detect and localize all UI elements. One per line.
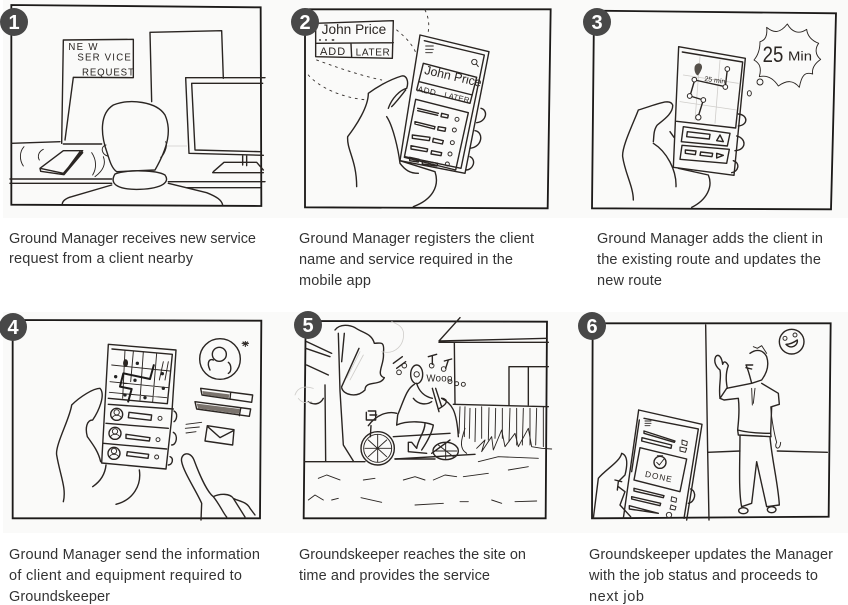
badge 2: 2	[299, 12, 311, 34]
house and fence	[439, 318, 552, 453]
panel 6: job status update	[588, 323, 833, 605]
panel 1: manager receives request	[9, 5, 265, 267]
badge 5	[294, 311, 322, 339]
caption 6: Groundskeeper updates the Manager	[589, 547, 833, 563]
client popup card: John Price	[322, 22, 386, 37]
client popup card: LATER	[356, 47, 390, 58]
waving groundskeeper	[715, 346, 781, 514]
smartphone showing done	[623, 410, 702, 520]
sketch frame 2	[305, 9, 551, 208]
badge 3: 3	[591, 12, 603, 34]
envelope with motion lines	[185, 422, 234, 445]
panel 5: groundskeeper on mower	[295, 318, 552, 584]
dashed zoom lines	[308, 10, 429, 100]
caption 6: with the job status and proceeds to	[588, 568, 818, 584]
caption 6: next job	[589, 589, 644, 605]
fingers behind phone	[688, 489, 695, 503]
caption 5	[299, 547, 526, 584]
smiley	[779, 329, 804, 354]
caption 4: Ground Manager send the information	[9, 547, 260, 563]
sketch frame 3	[592, 11, 836, 209]
caption 1	[9, 231, 256, 267]
person seen from behind	[62, 102, 223, 205]
caption 5: Groundskeeper reaches the site on	[299, 547, 526, 563]
wall partition	[150, 31, 223, 102]
tree	[295, 322, 404, 461]
caption 2	[299, 231, 534, 289]
sketch frame 1	[11, 5, 261, 206]
thought cloud: 25 min: Min	[788, 49, 812, 64]
caption 3	[597, 231, 823, 289]
badge 5: 5	[302, 315, 314, 337]
smartphone with map and staff list	[102, 344, 176, 469]
caption 4: of client and equipment required to	[9, 568, 242, 584]
smartphone: ADD	[417, 84, 437, 98]
speech bubble: new service request: SER VICE	[77, 53, 132, 64]
caption 3: Ground Manager adds the client in	[597, 231, 823, 247]
badge 4: 4	[7, 317, 19, 339]
badge 1	[0, 8, 28, 36]
thought cloud: 25 min: 25	[763, 42, 783, 67]
holding hand	[623, 102, 710, 207]
badge 6	[578, 312, 606, 340]
vibrating phone	[20, 147, 104, 177]
fingers behind phone	[466, 108, 486, 170]
ground lines	[304, 454, 538, 505]
equipment progress bars	[195, 388, 253, 416]
panel 2: manager registers client	[299, 9, 551, 289]
client popup card	[316, 21, 393, 58]
badge 2	[291, 8, 319, 36]
badge 6: 6	[586, 316, 598, 338]
badge 1: 1	[8, 12, 20, 34]
singing text: Wooo	[426, 374, 453, 385]
sketch frame 5	[304, 321, 547, 518]
wall edge and floor	[706, 325, 827, 520]
staff avatar	[200, 339, 249, 379]
caption 6	[588, 547, 833, 605]
speech bubble: new service request: NE W	[68, 42, 99, 53]
caption 2: Ground Manager registers the client	[299, 231, 534, 247]
speech bubble: new service request: REQUEST	[82, 67, 135, 78]
pointing finger	[181, 454, 255, 520]
fingers behind phone	[168, 411, 177, 465]
desk lines	[10, 142, 265, 188]
trailing sound dots	[448, 380, 465, 386]
holding hand	[57, 388, 140, 504]
client popup card: ADD	[320, 46, 346, 58]
fingers behind phone	[732, 114, 746, 173]
smartphone: John Price	[423, 63, 483, 90]
smartphone	[400, 35, 489, 173]
holding hand	[593, 453, 631, 518]
caption 4: Groundskeeper	[9, 589, 110, 605]
caption 2: mobile app	[299, 273, 371, 289]
computer monitor	[186, 78, 265, 173]
panel 3: manager updates route	[592, 11, 836, 289]
thought cloud: 25 min	[754, 24, 821, 87]
caption 1: request from a client nearby	[9, 251, 194, 267]
caption 3: the existing route and updates the	[597, 252, 821, 268]
sketch frame 4	[13, 320, 261, 518]
caption 2: name and service required in the	[299, 252, 513, 268]
holding hand	[348, 76, 436, 207]
caption 5: time and provides the service	[299, 568, 490, 584]
sketch frame 6	[592, 323, 831, 518]
speech bubble: new service request	[62, 39, 135, 143]
thought bubbles	[747, 79, 763, 96]
caption 1: Ground Manager receives new service	[9, 231, 256, 247]
caption 3: new route	[597, 273, 662, 289]
badge 3	[583, 8, 611, 36]
panel 4: manager sends info	[9, 320, 261, 605]
caption 4	[9, 547, 260, 605]
rider on mower	[361, 365, 458, 465]
music notes	[393, 354, 452, 375]
smartphone with route map: 25 min	[704, 76, 726, 86]
badge 4	[0, 313, 27, 341]
smartphone with route map	[673, 47, 745, 175]
smartphone showing done: DONE	[644, 469, 674, 484]
smartphone: LATER	[443, 90, 471, 105]
